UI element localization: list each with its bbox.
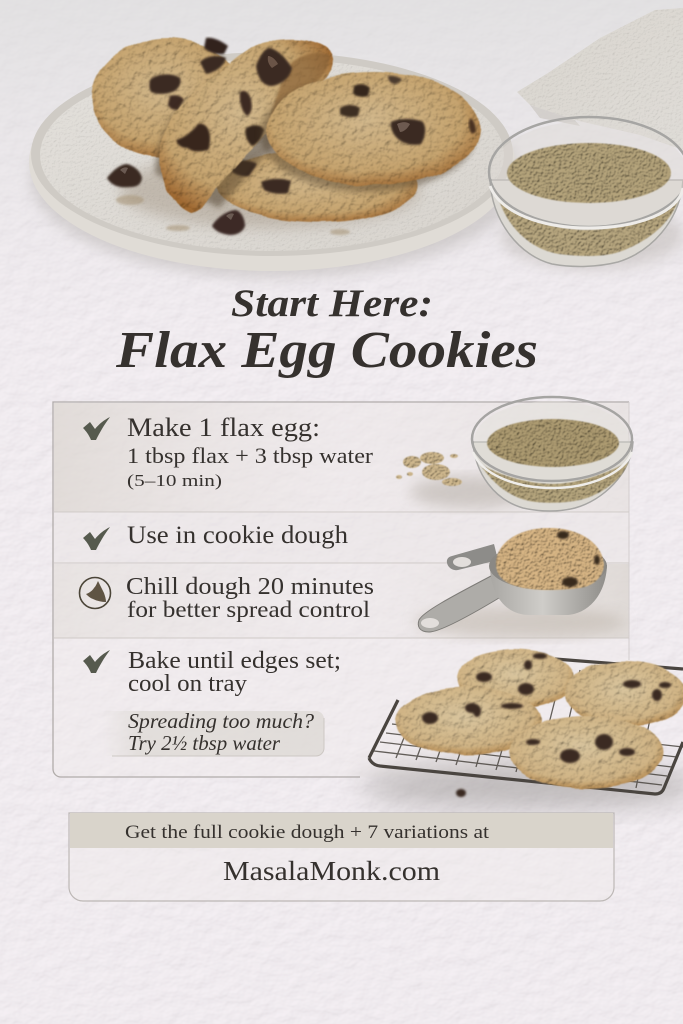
tip callout	[102, 709, 324, 756]
back cookie	[457, 649, 575, 709]
step 4 text	[128, 648, 341, 697]
plate of cookies	[29, 38, 521, 278]
right cookie shadow	[260, 76, 476, 192]
step 1 text: 1 tbsp flax + 3 tbsp water	[127, 443, 374, 468]
call to action panel	[69, 813, 614, 901]
step 1 text: Make 1 flax egg:	[127, 413, 320, 442]
step 3 text: Chill dough 20 minutes	[126, 574, 374, 600]
step 2 check icon	[83, 527, 110, 550]
right cookie	[266, 72, 480, 186]
step 4 text: Bake until edges set;	[128, 648, 341, 674]
step 1 check icon	[83, 417, 110, 440]
step 1 text	[127, 413, 374, 490]
step 1 text: (5–10 min)	[127, 471, 222, 490]
clock icon	[80, 578, 110, 608]
crumbs on plate	[116, 195, 350, 235]
bottom cookie	[218, 150, 418, 222]
title line one: Start Here:	[231, 282, 433, 325]
chocolate chips on cookies	[422, 653, 671, 797]
step 3 text: for better spread control	[127, 597, 370, 622]
website: MasalaMonk.com	[223, 856, 440, 886]
title line two: Flax Egg Cookies	[115, 322, 538, 379]
right cookie	[565, 661, 683, 727]
flax pile	[396, 452, 530, 508]
cooling rack with cookies	[360, 649, 683, 810]
broken cookie shadow	[155, 53, 329, 208]
broken cookie	[160, 40, 333, 213]
tip callout: Try 2½ tbsp water	[128, 731, 281, 755]
glass bowl of ground flax	[489, 117, 683, 270]
back left cookie	[92, 38, 244, 158]
tip callout: Spreading too much?	[128, 709, 315, 733]
step 2 text: Use in cookie dough	[127, 522, 349, 549]
linen napkin	[517, 8, 683, 150]
front cookie	[509, 716, 663, 788]
chocolate chips	[107, 164, 245, 235]
step 4 check icon	[83, 650, 110, 673]
step 4 text: cool on tray	[128, 671, 247, 697]
title	[115, 282, 538, 379]
plate	[29, 52, 515, 271]
left cookie	[395, 687, 541, 755]
measuring cup of dough	[415, 528, 625, 638]
wire rack	[369, 659, 683, 794]
step 3 text	[126, 574, 374, 622]
small glass bowl	[472, 397, 633, 511]
steps panel	[53, 397, 633, 777]
call to action text: Get the full cookie dough + 7 variations at	[125, 822, 490, 843]
